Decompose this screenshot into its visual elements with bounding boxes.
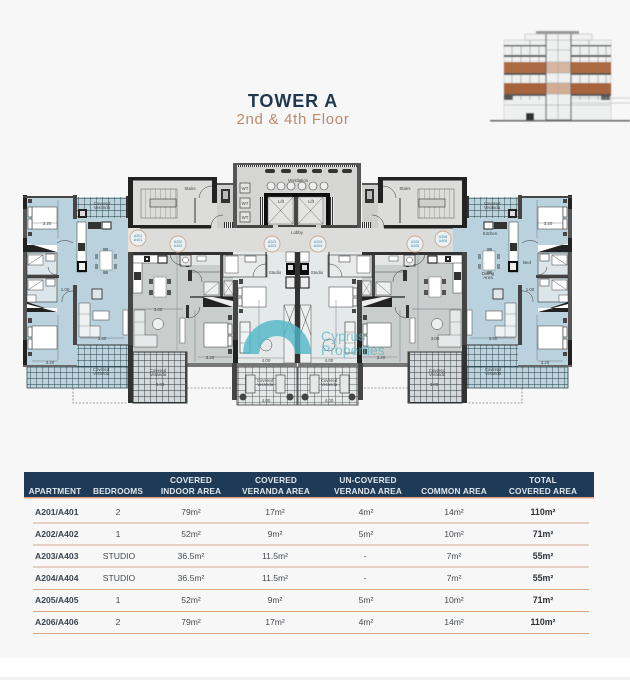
apartment number tags: A401 (134, 238, 142, 242)
row A205/A405: 5m² (359, 595, 374, 605)
table: apartment areas (24, 472, 594, 634)
row A205/A405: 52m² (181, 595, 201, 605)
row A206/A406: 79m² (181, 617, 201, 627)
plan room labels: 3.00 (430, 382, 439, 387)
table header: APARTMENT (29, 486, 81, 496)
row A204/A404: A204/A404 (35, 573, 79, 583)
row A205/A405: 71m² (533, 595, 553, 605)
plan room labels: Veranda (484, 205, 501, 210)
table header: COMMON AREA (421, 486, 487, 496)
panel: left wing apartments A201 A202 A203 (23, 177, 298, 405)
row A204/A404: 55m² (533, 573, 553, 583)
lobby entry tints (128, 228, 467, 252)
apartment number tags (130, 230, 451, 252)
plan room labels: Bed (523, 260, 531, 265)
plan room labels: Covered (94, 201, 111, 206)
row A202/A402: 5m² (359, 529, 374, 539)
plan room labels: 3.00 (431, 336, 440, 341)
row A206/A406 (35, 617, 556, 627)
row A201/A401: 110m² (531, 507, 556, 517)
panel: central lift core: Lift (278, 199, 285, 204)
plan room labels: Covered (484, 201, 501, 206)
row A205/A405: A205/A405 (35, 595, 79, 605)
row A206/A406: 4m² (359, 617, 374, 627)
plan room labels: Veranda (321, 382, 338, 387)
table header: BEDROOMS (93, 486, 143, 496)
plan room labels: 3.20 (43, 221, 52, 226)
row A202/A402: 52m² (181, 529, 201, 539)
row A202/A402 (35, 529, 553, 539)
plan room labels: Stairs (399, 186, 411, 191)
plan room labels: 3.60 (489, 336, 498, 341)
plan room labels: Covered (321, 378, 338, 383)
panel: central lift core (233, 163, 361, 228)
panel: central lift core: Ventilation (288, 178, 309, 183)
row A201/A401: A201/A401 (35, 507, 79, 517)
plan room labels: Studio (311, 270, 324, 275)
watermark: Cyprus Properties (243, 320, 385, 358)
plan room labels: Covered (257, 378, 274, 383)
watermark: Cyprus Properties: Properties (321, 342, 385, 358)
plan room labels: Dining (482, 271, 495, 276)
row A203/A403: 55m² (533, 551, 553, 561)
apartment number tags: A402 (174, 244, 182, 248)
plan room labels: Covered (93, 367, 110, 372)
plan room labels: Veranda (257, 382, 274, 387)
plan room labels (43, 186, 553, 403)
row A203/A403: - (364, 551, 367, 561)
row A201/A401: 79m² (181, 507, 201, 517)
row A203/A403 (35, 551, 553, 561)
apartment number tags: A206 (439, 235, 447, 239)
row A204/A404: STUDIO (103, 573, 136, 583)
row A204/A404 (35, 573, 553, 583)
table header: INDOOR AREA (161, 486, 221, 496)
table header: VERANDA AREA (242, 486, 310, 496)
building elevation illustration (490, 31, 630, 122)
plan room labels: Veranda (93, 371, 110, 376)
plan room labels: Covered (150, 368, 167, 373)
row A204/A404: 7m² (447, 573, 462, 583)
apartment number tags: A404 (314, 244, 322, 248)
plan room labels: Veranda (485, 371, 502, 376)
apartment number tags: A405 (411, 244, 419, 248)
row A202/A402: A202/A402 (35, 529, 79, 539)
row A201/A401: 4m² (359, 507, 374, 517)
table header (24, 472, 594, 498)
panel: central lift core: WT (242, 215, 249, 220)
row A206/A406: 17m² (265, 617, 285, 627)
plan room labels: 1.00 (61, 287, 70, 292)
table header: COVERED AREA (509, 486, 577, 496)
plan room labels: Veranda (150, 372, 167, 377)
row A204/A404: - (364, 573, 367, 583)
apartment number tags: A202 (174, 240, 182, 244)
apartment number tags: A205 (411, 240, 419, 244)
plan room labels: 3.00 (156, 382, 165, 387)
panel: central lift core: WT (242, 186, 249, 191)
row A206/A406: 14m² (444, 617, 464, 627)
table row dividers (33, 522, 589, 634)
plan room labels: Stairs (184, 186, 196, 191)
row A206/A406: A206/A406 (35, 617, 79, 627)
plan room labels: Covered (485, 367, 502, 372)
row A202/A402: 10m² (444, 529, 464, 539)
row A203/A403: 36.5m² (178, 551, 205, 561)
watermark: Cyprus Properties: Cyprus (321, 328, 365, 344)
apartment number tags: A403 (268, 244, 276, 248)
plan room labels: Lobby (291, 230, 304, 235)
floor plan (23, 163, 572, 405)
row A201/A401: 2 (116, 507, 121, 517)
table header: TOTAL (529, 475, 557, 485)
plan room labels: Covered (429, 368, 446, 373)
table header: UN-COVERED (339, 475, 397, 485)
plan room labels: 3.20 (544, 221, 553, 226)
subtitle: 2nd & 4th Floor (236, 111, 350, 128)
table header: VERANDA AREA (334, 486, 402, 496)
panel: central lift core: WT (242, 201, 249, 206)
row A205/A405: 10m² (444, 595, 464, 605)
plan room labels: Area (483, 275, 493, 280)
row A202/A402: 1 (116, 529, 121, 539)
apartment number tags: A204 (314, 240, 322, 244)
apartment number tags: A201 (134, 234, 142, 238)
plan room labels: 3.60 (98, 336, 107, 341)
panel: lobby corridor (128, 228, 467, 252)
title (236, 91, 350, 128)
row A205/A405: 1 (116, 595, 121, 605)
panel: central lift core: Lift (308, 199, 315, 204)
plan room labels: 3.00 (154, 307, 163, 312)
plan room labels: Veranda (94, 205, 111, 210)
row A202/A402: 71m² (533, 529, 553, 539)
row A201/A401 (35, 507, 556, 517)
table header: COVERED (255, 475, 297, 485)
apartment number tags: A203 (268, 240, 276, 244)
table header: COVERED (170, 475, 212, 485)
panel: right wing apartments A204 A205 A206 (297, 177, 572, 405)
row A206/A406: 2 (116, 617, 121, 627)
plan room labels: 4.00 (325, 398, 334, 403)
row A203/A403: 11.5m² (262, 551, 288, 561)
row A201/A401: 17m² (265, 507, 285, 517)
plan room labels: 3.20 (46, 360, 55, 365)
title: TOWER A (248, 91, 338, 111)
row A203/A403: A203/A403 (35, 551, 79, 561)
plan room labels: 1.00 (526, 287, 535, 292)
plan room labels: Veranda (429, 372, 446, 377)
row A205/A405 (35, 595, 553, 605)
row A206/A406: 110m² (531, 617, 556, 627)
plan room labels: 4.00 (325, 358, 334, 363)
plan room labels: 4.00 (262, 398, 271, 403)
plan room labels: 3.20 (377, 355, 386, 360)
row A201/A401: 14m² (444, 507, 464, 517)
plan room labels: 3.20 (206, 355, 215, 360)
plan room labels: 4.00 (262, 358, 271, 363)
row A203/A403: 7m² (447, 551, 462, 561)
row A204/A404: 11.5m² (262, 573, 288, 583)
plan room labels: 3.20 (541, 360, 550, 365)
row A203/A403: STUDIO (103, 551, 136, 561)
row A202/A402: 9m² (268, 529, 283, 539)
row A204/A404: 36.5m² (178, 573, 205, 583)
plan room labels: Kitchen (483, 231, 498, 236)
plan room labels: Studio (269, 270, 282, 275)
apartment number tags: A406 (439, 239, 447, 243)
row A205/A405: 9m² (268, 595, 283, 605)
